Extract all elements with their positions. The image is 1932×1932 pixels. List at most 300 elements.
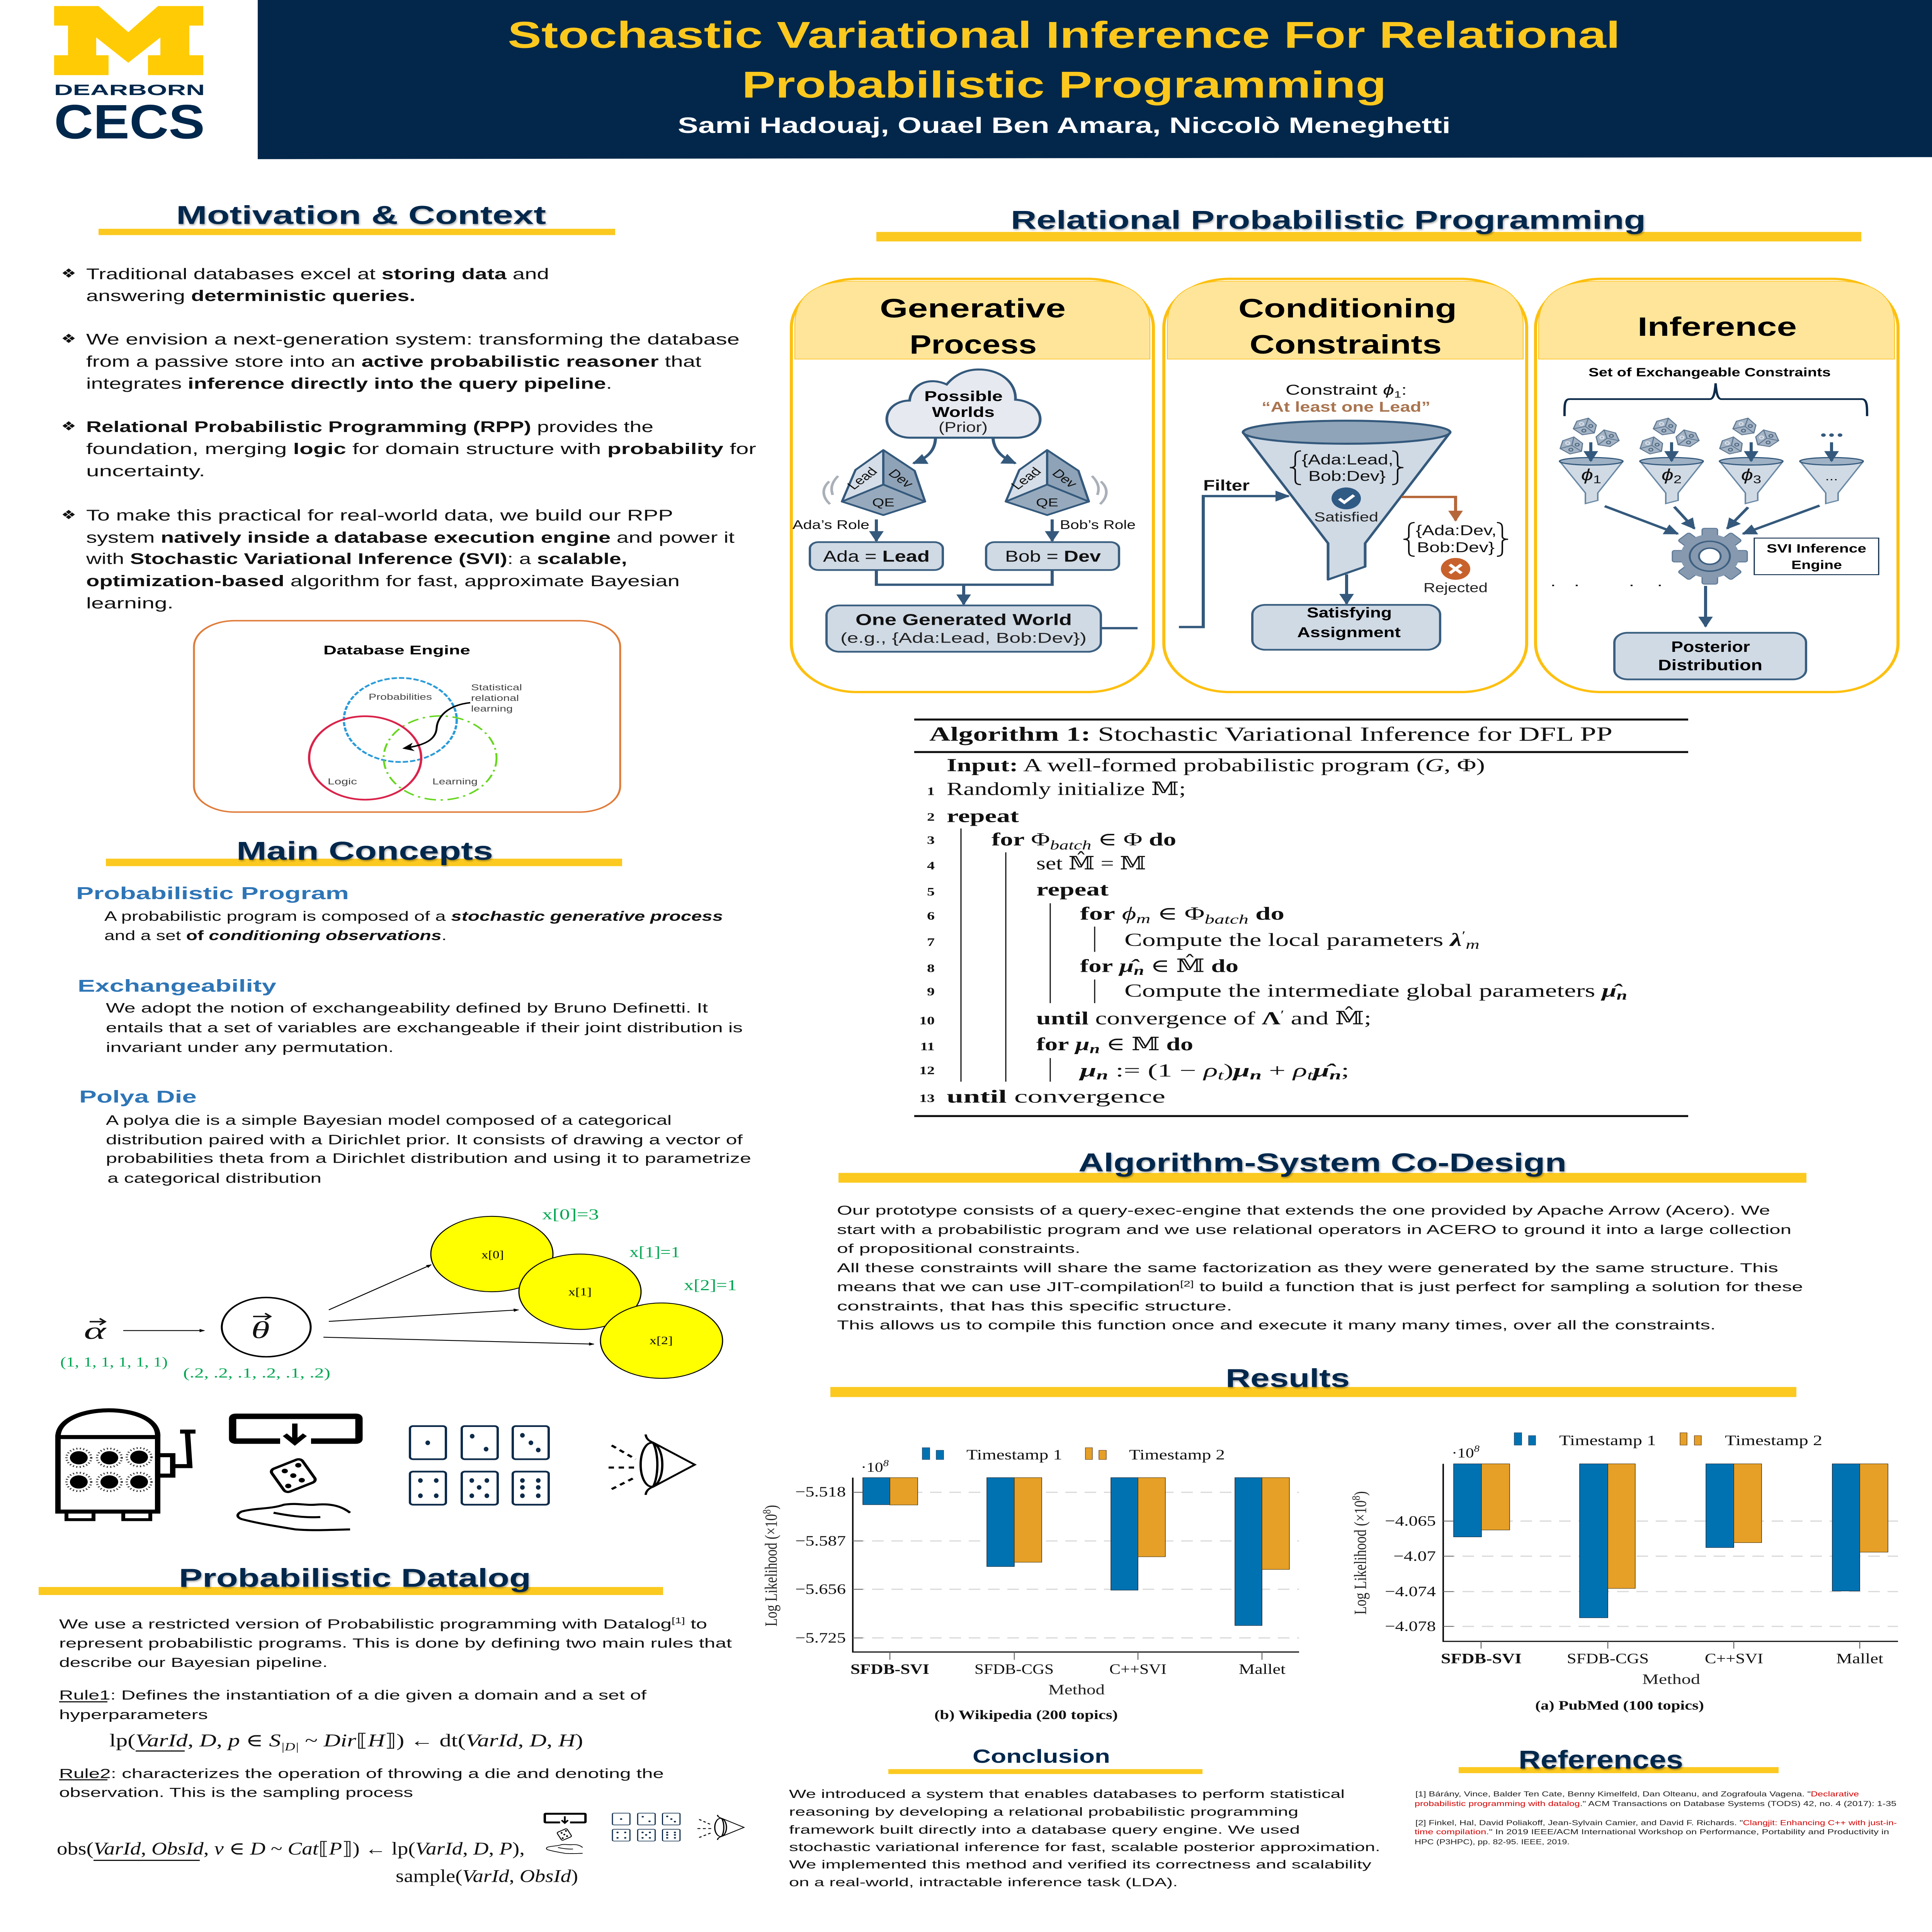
algorithm lines: until convergence bbox=[947, 1087, 1165, 1107]
arrow: statistical relational learning bbox=[405, 703, 470, 748]
bars bbox=[863, 1478, 1289, 1626]
text block: co-design: start with a probabilistic program and we use relational operators in ACERO to ground it into a large collection bbox=[837, 1223, 1791, 1237]
text block: motivation: ❖ bbox=[61, 267, 76, 281]
text block: rule 2: observation. This is the sampling process bbox=[59, 1785, 413, 1800]
algorithm lines: ∈ Φ bbox=[1150, 904, 1205, 924]
alpha symbol: α bbox=[84, 1318, 107, 1345]
chart legend bbox=[922, 1447, 1225, 1463]
axes bbox=[1443, 1464, 1898, 1641]
venn labels: Probabilities bbox=[369, 692, 432, 702]
die: Ada: QE bbox=[872, 497, 895, 509]
x labels: C++SVI bbox=[1109, 1661, 1167, 1677]
node labels: x[2] bbox=[650, 1335, 673, 1347]
node: x[2] bbox=[600, 1303, 723, 1378]
heading: Algorithm-System Co-Design: Algorithm-System Co-Design bbox=[1078, 1148, 1566, 1177]
chart: Wikipedia bar chart bbox=[760, 1447, 1299, 1722]
text block: co-design: of propositional constraints. bbox=[837, 1242, 1080, 1256]
text block: datalog intro: [1] bbox=[672, 1616, 685, 1625]
concept: polya die: distribution paired with a Dirichlet prior. It consists of drawing a vector of bbox=[106, 1132, 743, 1147]
algorithm lines: set 𝕄̂ = 𝕄 bbox=[1036, 851, 1146, 874]
constraint label: “At least one Lead” bbox=[1262, 399, 1430, 415]
funnel 2 bbox=[1640, 457, 1703, 503]
funnel labels: 1 bbox=[1593, 474, 1601, 486]
line numbers: 1 bbox=[927, 785, 935, 798]
algorithm lines: n bbox=[1617, 988, 1627, 1003]
funnel bbox=[1243, 421, 1450, 580]
algorithm lines: ; bbox=[1341, 1061, 1349, 1081]
icon: check bbox=[1332, 488, 1361, 509]
funnel labels: ϕ bbox=[1662, 466, 1673, 484]
text block: rule 1: hyperparameters bbox=[59, 1707, 208, 1722]
concept: polya die bbox=[79, 1087, 751, 1185]
algorithm lines: n bbox=[1134, 963, 1144, 978]
y tick labels: −5.587 bbox=[795, 1533, 846, 1549]
y tick labels: −5.656 bbox=[795, 1581, 846, 1597]
text block: co-design: constraints, that has this specific structure. bbox=[837, 1299, 1232, 1313]
concept: probabilistic program: A probabilistic program is composed of a stochastic generative process bbox=[104, 908, 723, 924]
text block: references: [2] Finkel, Hal, David Poliakoff, Jean-Sylvain Camier, and David F. Richards. "Clangjit: Enhancing C++ with just-in- bbox=[1415, 1819, 1897, 1827]
icon: slot machine bbox=[58, 1410, 196, 1520]
text block: conclusion bbox=[789, 1787, 1380, 1889]
rejected assignment text: {Ada:Dev, bbox=[1416, 522, 1497, 539]
box: satisfying assignment: Assignment bbox=[1297, 624, 1401, 640]
text block: datalog intro: We use a restricted version of Probabilistic programming with Datalog bbox=[59, 1616, 607, 1631]
node labels bbox=[481, 1249, 673, 1347]
icon: hopper, die and hand bbox=[233, 1416, 359, 1530]
satisfied assignment text: {Ada:Lead, bbox=[1302, 452, 1393, 468]
y tick labels: −4.078 bbox=[1385, 1618, 1436, 1634]
chart legend bbox=[1514, 1432, 1822, 1448]
concept: exchangeability: Exchangeability bbox=[78, 976, 277, 995]
text block: motivation: integrates inference directly into the query pipeline . bbox=[86, 375, 612, 392]
brace bbox=[1565, 383, 1867, 416]
title: Stochastic Variational Inference For Relational bbox=[508, 14, 1620, 56]
heading: Main Concepts: Main Concepts bbox=[236, 836, 493, 866]
rejected label: Rejected bbox=[1423, 580, 1488, 595]
concept: probabilistic program bbox=[76, 884, 723, 943]
small icon: eye bbox=[697, 1815, 744, 1840]
text block: datalog intro: describe our Bayesian pipeline. bbox=[59, 1655, 328, 1670]
algorithm lines: repeat bbox=[947, 806, 1019, 827]
exponent label: 8 bbox=[883, 1458, 889, 1468]
chart legend: Timestamp 1 bbox=[1559, 1432, 1656, 1448]
rejected assignment text: Bob:Dev} bbox=[1417, 539, 1495, 556]
funnel labels: ... bbox=[1825, 470, 1838, 483]
funnel labels: 3 bbox=[1753, 474, 1761, 486]
label: SVI inference engine: Engine bbox=[1791, 558, 1842, 571]
algorithm lines: do bbox=[1255, 904, 1284, 924]
concept: probabilistic program: Probabilistic Program bbox=[76, 884, 349, 903]
box: satisfying assignment bbox=[1252, 605, 1440, 650]
box: one generated world: One Generated World bbox=[855, 611, 1072, 629]
formula: rule 2: obs(VarId, ObsId, v ∈ D ~ Cat⟦P⟧) ← lp(VarId, D, P), bbox=[57, 1838, 525, 1859]
heading: References: References bbox=[1519, 1745, 1683, 1774]
venn labels bbox=[328, 682, 522, 786]
text block: motivation: foundation, merging logic for domain structure with probability for bbox=[86, 440, 756, 457]
panel title: Inference bbox=[1638, 312, 1797, 342]
bars bbox=[1454, 1464, 1888, 1618]
text block: co-design: Our prototype consists of a query-exec-engine that extends the one provided by Apache Arrow (Acero). We bbox=[837, 1203, 1770, 1218]
y axis title: ) bbox=[1351, 1491, 1370, 1496]
dots bbox=[1821, 434, 1842, 437]
panel title bbox=[880, 294, 1066, 359]
algorithm lines: n bbox=[1096, 1068, 1108, 1082]
die: Ada: Dev bbox=[885, 467, 917, 490]
small icon: die faces bbox=[612, 1813, 680, 1841]
title bbox=[508, 14, 1620, 106]
prior values: (1, 1, 1, 1, 1, 1) bbox=[60, 1354, 168, 1370]
icon: cross bbox=[1441, 558, 1470, 580]
x labels: SFDB-CGS bbox=[975, 1661, 1054, 1677]
algorithm lines: do bbox=[1211, 956, 1238, 976]
heading: Results bbox=[830, 1364, 1796, 1397]
algorithm lines: m bbox=[1466, 937, 1480, 952]
icon: eye observing bbox=[609, 1434, 695, 1495]
heading: References bbox=[1459, 1745, 1779, 1774]
algorithm input: Input: A well-formed probabilistic program ( G, Φ) bbox=[947, 755, 1485, 776]
logo: University of Michigan Dearborn CECS bbox=[54, 6, 205, 149]
text block: motivation: To make this practical for real-world data, we build our RPP bbox=[86, 507, 673, 524]
algorithm lines: ρ bbox=[1202, 1061, 1218, 1081]
algorithm lines: n bbox=[1090, 1041, 1100, 1056]
algorithm lines: + bbox=[1262, 1061, 1293, 1081]
text block: rule 1 bbox=[59, 1687, 647, 1722]
node: x[1] bbox=[519, 1254, 641, 1330]
venn labels: Statistical bbox=[471, 682, 522, 692]
panel header bbox=[795, 281, 1150, 359]
rejected assignment text bbox=[1403, 522, 1508, 556]
heading: Conclusion bbox=[888, 1746, 1202, 1774]
exponent label: ·10 bbox=[861, 1460, 886, 1475]
algorithm title: Algorithm 1: Stochastic Variational Inference for DFL PP bbox=[929, 723, 1612, 745]
text block: conclusion: We introduced a system that enables databases to perform statistical bbox=[789, 1787, 1345, 1801]
text block: references: time compilation." In 2019 IEEE/ACM International Workshop on Performance, Portability and Productivity in bbox=[1415, 1828, 1889, 1836]
venn labels: Learning bbox=[432, 777, 478, 786]
algorithm lines: m bbox=[1136, 912, 1150, 926]
formula: rule 1: Dir⟦H⟧) ← dt(VarId, D, H) bbox=[323, 1730, 583, 1750]
y axis title: 8 bbox=[760, 1509, 773, 1514]
concept: exchangeability bbox=[78, 976, 743, 1055]
algorithm rules bbox=[914, 719, 1688, 1117]
constraint label: : bbox=[1401, 382, 1407, 398]
panel header bbox=[1539, 281, 1895, 359]
cloud: possible worlds: Possible bbox=[924, 388, 1003, 405]
tick marks bbox=[1443, 1521, 1860, 1648]
x axis title: Method bbox=[1642, 1671, 1700, 1687]
heading: database engine: Database Engine bbox=[323, 643, 470, 657]
satisfied assignment text bbox=[1290, 451, 1403, 485]
concept: polya die: probabilities theta from a Dirichlet distribution and using it to parametrize bbox=[106, 1150, 751, 1166]
x labels: SFDB-CGS bbox=[1567, 1650, 1649, 1667]
arrows into funnels bbox=[1591, 442, 1832, 461]
chart legend: Timestamp 2 bbox=[1725, 1432, 1822, 1448]
gridlines bbox=[1443, 1521, 1898, 1626]
logo: University of Michigan Dearborn CECS: CECS bbox=[54, 95, 205, 149]
formula: rule 2: sample(VarId, ObsId) bbox=[396, 1866, 578, 1886]
panel title: Conditioning bbox=[1238, 294, 1457, 323]
heading: Probabilistic Datalog: Probabilistic Datalog bbox=[179, 1563, 531, 1592]
chart caption: (a) PubMed (100 topics) bbox=[1535, 1698, 1704, 1713]
concept: exchangeability: entails that a set of variables are exchangeable if their joint distribution is bbox=[106, 1020, 743, 1035]
algorithm lines: ∈ 𝕄 bbox=[1100, 1034, 1166, 1054]
theta values: (.2, .2, .1, .2, .1, .2) bbox=[183, 1366, 330, 1381]
constraint label: Constraint ϕ bbox=[1286, 382, 1394, 398]
y tick labels: −5.725 bbox=[795, 1630, 846, 1646]
die: Ada bbox=[842, 450, 925, 515]
panel: conditioning constraints bbox=[1164, 279, 1527, 692]
algorithm lines: Compute the intermediate global parameters μ̂ bbox=[1124, 981, 1616, 1001]
text block: motivation: learning. bbox=[86, 595, 173, 612]
role labels: Ada’s Role bbox=[793, 518, 869, 532]
funnel labels: ϕ bbox=[1581, 466, 1593, 484]
stray marks bbox=[1552, 585, 1661, 586]
line numbers: 2 bbox=[927, 811, 935, 823]
box: one generated world bbox=[827, 605, 1101, 652]
satisfied label: Satisfied bbox=[1314, 509, 1378, 524]
heading: Motivation & Context bbox=[99, 201, 615, 235]
count labels: x[0]=3 bbox=[542, 1206, 599, 1223]
chart legend: Timestamp 2 bbox=[1129, 1447, 1225, 1463]
formula: rule 1: ~ bbox=[299, 1730, 323, 1750]
text block: motivation: ❖ bbox=[61, 508, 76, 522]
node labels: x[1] bbox=[568, 1286, 592, 1298]
node: x[0] bbox=[431, 1216, 553, 1292]
text block: references: HPC (P3HPC), pp. 82-95. IEEE, 2019. bbox=[1415, 1838, 1570, 1846]
arrow: theta to x1 bbox=[329, 1310, 519, 1321]
funnel 1 bbox=[1560, 457, 1623, 503]
algorithm lines: := (1 − bbox=[1108, 1061, 1204, 1081]
algorithm lines: n bbox=[1329, 1068, 1341, 1082]
text block: conclusion: stochastic variational inference for fast, scalable posterior approximation. bbox=[789, 1840, 1380, 1854]
text block: rule 2 bbox=[59, 1766, 664, 1800]
dice cluster 1 bbox=[1559, 416, 1621, 455]
line numbers: 7 bbox=[927, 936, 935, 949]
algorithm lines: ′ bbox=[1462, 929, 1466, 942]
line numbers: 8 bbox=[927, 962, 935, 975]
formula: rule 1: |D| bbox=[281, 1741, 299, 1753]
algorithm lines: for μ̂ bbox=[1080, 956, 1133, 976]
arrow: funnel to assignment bbox=[1345, 574, 1348, 604]
funnel 3 bbox=[1719, 457, 1783, 503]
algorithm lines: ρ bbox=[1292, 1061, 1307, 1081]
text block: motivation: optimization-based algorithm for fast, approximate Bayesian bbox=[86, 573, 680, 590]
algorithm lines: n bbox=[1250, 1068, 1262, 1082]
tick marks bbox=[853, 1492, 1262, 1660]
chart legend: Timestamp 1 bbox=[966, 1447, 1062, 1463]
venn: learning circle bbox=[384, 716, 497, 800]
panel title: Process bbox=[910, 330, 1037, 359]
text block: co-design: to build a function that is just perfect for sampling a solution for these bbox=[1194, 1280, 1803, 1294]
line numbers: 4 bbox=[927, 859, 935, 872]
funnel 4 bbox=[1800, 457, 1863, 503]
algorithm lines: Compute the local parameters λ bbox=[1124, 930, 1461, 950]
count labels: x[2]=1 bbox=[684, 1277, 737, 1293]
role labels: Bob’s Role bbox=[1060, 518, 1136, 532]
dice cluster 3 bbox=[1719, 416, 1780, 455]
chart: PubMed bar chart bbox=[1349, 1432, 1898, 1713]
x labels: Mallet bbox=[1836, 1650, 1883, 1667]
text block: conclusion: framework built directly into a database query engine. We used bbox=[789, 1823, 1300, 1836]
algorithm lines: μ bbox=[1232, 1061, 1250, 1081]
text block: motivation: We envision a next-generation system: transforming the database bbox=[86, 331, 740, 348]
y axis title: Log Likelihood (×10 bbox=[1351, 1509, 1370, 1615]
text block: motivation: answering deterministic queries. bbox=[86, 287, 415, 304]
box: satisfying assignment: Satisfying bbox=[1307, 605, 1392, 621]
diagram: polya die model bbox=[60, 1206, 737, 1381]
node labels: x[0] bbox=[481, 1249, 504, 1261]
y tick labels bbox=[1385, 1513, 1436, 1634]
algorithm lines: ∈ 𝕄̂ bbox=[1144, 954, 1211, 976]
panel title: Constraints bbox=[1250, 330, 1442, 359]
text block: references: [1] Bárány, Vince, Balder Ten Cate, Benny Kimelfeld, Dan Olteanu, and Zografoula Vagena. "Declarative bbox=[1415, 1790, 1859, 1798]
funnel labels: 2 bbox=[1673, 474, 1682, 486]
algorithm lines: t bbox=[1218, 1068, 1225, 1082]
algorithm box bbox=[914, 719, 1688, 1117]
box: one generated world: (e.g., {Ada:Lead, Bob:Dev}) bbox=[840, 630, 1087, 646]
arrow: alpha to theta bbox=[123, 1330, 204, 1331]
count labels: x[1]=1 bbox=[629, 1243, 680, 1260]
chart caption: (b) Wikipedia (200 topics) bbox=[934, 1708, 1118, 1722]
line numbers bbox=[919, 785, 935, 1105]
y axis title: ) bbox=[762, 1505, 781, 1509]
concept: polya die: Polya Die bbox=[79, 1087, 197, 1107]
funnel labels: ϕ bbox=[1741, 466, 1753, 484]
connector stub bbox=[1101, 627, 1138, 630]
text block: datalog intro: to bbox=[685, 1616, 707, 1631]
box: posterior distribution bbox=[1614, 633, 1806, 679]
arrow: rejected bbox=[1402, 497, 1456, 520]
concept: exchangeability: We adopt the notion of exchangeability defined by Bruno Definetti. It bbox=[106, 1000, 708, 1015]
y axis title: Log Likelihood (×10 bbox=[762, 1520, 781, 1626]
count labels bbox=[542, 1206, 737, 1293]
heading: Probabilistic Datalog bbox=[39, 1563, 663, 1595]
header banner bbox=[258, 0, 1932, 159]
panel: generative process bbox=[791, 279, 1153, 692]
dice cluster 2 bbox=[1639, 416, 1701, 455]
theta node: θ bbox=[251, 1317, 270, 1344]
text block: motivation: uncertainty. bbox=[86, 463, 205, 480]
heading: Relational Probabilistic Programming bbox=[876, 205, 1861, 242]
cloud: possible worlds bbox=[887, 369, 1040, 438]
algorithm lines: t bbox=[1307, 1068, 1314, 1082]
line numbers: 6 bbox=[927, 910, 935, 922]
role labels bbox=[793, 518, 1136, 532]
algorithm lines: μ̂ bbox=[1311, 1061, 1336, 1081]
icon: six die faces bbox=[410, 1426, 549, 1505]
algorithm lines: ′ bbox=[1281, 1008, 1284, 1022]
text block: motivation bbox=[61, 265, 756, 612]
text block: conclusion: We implemented this method and verified its correctness and scalability bbox=[789, 1858, 1371, 1871]
panel title: Generative bbox=[880, 294, 1066, 323]
y axis title: 8 bbox=[1349, 1496, 1362, 1500]
panel title bbox=[1238, 294, 1457, 359]
concept: polya die: A polya die is a simple Bayesian model composed of a categorical bbox=[106, 1112, 672, 1128]
panel: inference bbox=[1536, 279, 1898, 692]
panel: database engine venn diagram bbox=[194, 621, 620, 812]
text block: references: probabilistic programming with datalog." ACM Transactions on Database Systems (TODS) 42, no. 4 (2017): 1-35 bbox=[1415, 1799, 1896, 1808]
die motion marks: Bob bbox=[1092, 476, 1106, 504]
concept: polya die: a categorical distribution bbox=[107, 1170, 321, 1185]
arrow: cloud to left die bbox=[913, 438, 935, 463]
x labels: SFDB-SVI bbox=[1441, 1650, 1522, 1667]
icon: gear bbox=[1672, 528, 1747, 584]
text block: rule 1: Rule1: Defines the instantiation of a die given a domain and a set of bbox=[59, 1687, 647, 1702]
heading: Motivation & Context: Motivation & Context bbox=[176, 201, 546, 230]
label: SVI inference engine: SVI Inference bbox=[1767, 541, 1866, 555]
arrow: Bob role bbox=[1051, 519, 1054, 541]
box: Bob = Dev bbox=[986, 542, 1119, 570]
line numbers: 13 bbox=[919, 1092, 935, 1105]
venn: logic circle bbox=[309, 716, 421, 800]
small icon: hopper bbox=[545, 1814, 585, 1854]
y tick labels: −5.518 bbox=[795, 1484, 846, 1500]
heading: Relational Probabilistic Programming: Relational Probabilistic Programming bbox=[1011, 205, 1646, 234]
algorithm lines: repeat bbox=[1036, 879, 1109, 900]
text block: motivation: system natively inside a database execution engine and power it bbox=[86, 529, 735, 546]
exponent label: 8 bbox=[1474, 1444, 1480, 1454]
x labels: SFDB-SVI bbox=[850, 1661, 929, 1677]
text block: motivation: Traditional databases excel at storing data and bbox=[86, 265, 549, 283]
label: SVI inference engine bbox=[1754, 538, 1879, 575]
line numbers: 10 bbox=[919, 1014, 935, 1027]
text block: co-design: All these constraints will share the same factorization as they were generated by the same structure. This bbox=[837, 1261, 1778, 1275]
text block: conclusion: on a real-world, intractable inference task (LDA). bbox=[789, 1876, 1178, 1889]
cloud: possible worlds: Worlds bbox=[932, 404, 995, 420]
algorithm lines: do bbox=[1166, 1034, 1193, 1054]
line numbers: 9 bbox=[927, 985, 935, 998]
venn labels: Logic bbox=[328, 777, 357, 786]
arrow: engine to posterior bbox=[1704, 586, 1707, 626]
text block: co-design: means that we can use JIT-compilation bbox=[837, 1280, 1138, 1294]
y tick labels: −4.07 bbox=[1393, 1548, 1436, 1564]
formula: rule 1 bbox=[109, 1730, 583, 1753]
arrow: theta to x2 bbox=[323, 1337, 594, 1344]
text block: co-design: [2] bbox=[1180, 1280, 1194, 1289]
filter arrow and label bbox=[1179, 477, 1289, 627]
y tick labels: −4.074 bbox=[1385, 1583, 1436, 1599]
algorithm lines: do bbox=[1149, 830, 1176, 850]
x labels: Mallet bbox=[1239, 1661, 1286, 1677]
line numbers: 3 bbox=[927, 834, 935, 847]
box: posterior distribution: Posterior bbox=[1671, 638, 1750, 655]
cloud: possible worlds: (Prior) bbox=[939, 419, 988, 435]
venn labels: learning bbox=[471, 704, 513, 714]
funnel labels bbox=[1581, 466, 1838, 486]
text block: references bbox=[1415, 1790, 1897, 1846]
text block: datalog intro: represent probabilistic programs. This is done by defining two main rules that bbox=[59, 1636, 732, 1651]
line numbers: 12 bbox=[919, 1064, 935, 1077]
algorithm lines: and 𝕄̂; bbox=[1284, 1006, 1371, 1029]
constraint label: 1 bbox=[1394, 389, 1401, 400]
indentation guides bbox=[961, 828, 1095, 1082]
heading: Main Concepts bbox=[106, 836, 622, 866]
panel header bbox=[1167, 281, 1523, 359]
algorithm lines: ∈ Φ bbox=[1091, 830, 1149, 850]
heading: Algorithm-System Co-Design bbox=[838, 1148, 1806, 1183]
text block: motivation: ❖ bbox=[61, 419, 76, 434]
die: Bob bbox=[1006, 450, 1089, 515]
line numbers: 11 bbox=[920, 1040, 935, 1053]
arrow: theta to x0 bbox=[329, 1265, 431, 1310]
box: Bob = Dev: Bob = Dev bbox=[1005, 548, 1101, 565]
title: Probabilistic Programming bbox=[742, 64, 1386, 106]
arrows to engine bbox=[1605, 505, 1820, 534]
formula: rule 2 bbox=[57, 1838, 578, 1886]
heading: Results: Results bbox=[1226, 1364, 1350, 1393]
text block: co-design: This allows us to compile this function once and execute it many many times, over all the constraints. bbox=[837, 1318, 1716, 1332]
logo: University of Michigan Dearborn CECS: DEARBORN bbox=[54, 82, 205, 98]
algorithm lines bbox=[947, 779, 1627, 1107]
